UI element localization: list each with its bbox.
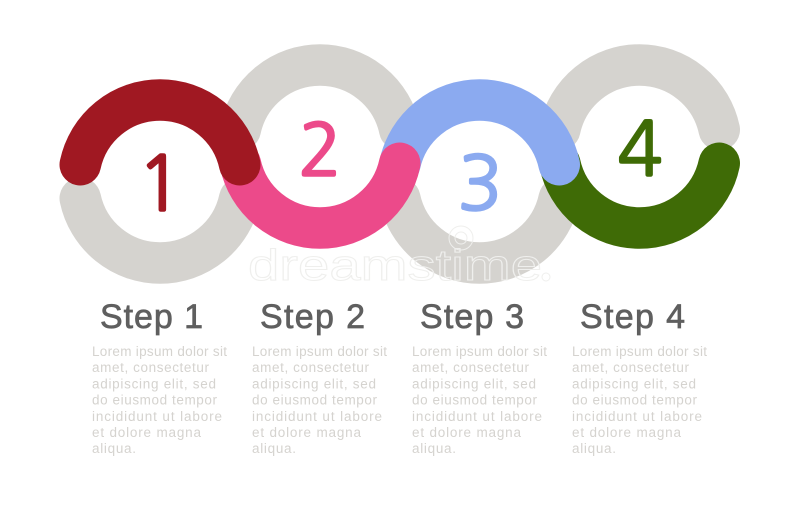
text block: step 1: adipiscing elit, sed (92, 376, 216, 392)
text block: step 4: amet, consectetur (572, 360, 690, 375)
arc: step 4 green (560, 163, 719, 228)
arc: step 2 pink (240, 163, 400, 228)
watermark: dreamstime (248, 241, 542, 290)
text block: step 2: Lorem ipsum dolor sit (252, 344, 387, 359)
number 3: 3 (458, 147, 502, 221)
text block: step 2: incididunt ut labore (252, 409, 382, 424)
text block: step 2: et dolore magna (252, 425, 361, 440)
text block: step 3: aliqua. (412, 441, 456, 456)
text block: step 3: do eiusmod tempor (412, 392, 538, 408)
text block: step 4: et dolore magna (572, 425, 681, 440)
number 2: 2 (298, 116, 342, 186)
text block: step 3: Lorem ipsum dolor sit (412, 344, 547, 359)
number 1: 1 (137, 146, 183, 222)
chain of grey background arcs (80, 65, 719, 263)
text block: step 2: aliqua. (252, 441, 296, 456)
heading: Step 3: Step 3 (420, 298, 524, 336)
number 4: 4 (618, 112, 662, 186)
text block: step 1: Lorem ipsum dolor sit (92, 344, 227, 359)
text block: step 3: incididunt ut labore (412, 409, 542, 424)
text block: step 2: do eiusmod tempor (252, 392, 378, 408)
text block: step 4: aliqua. (572, 441, 616, 456)
text block: step 3: adipiscing elit, sed (412, 376, 536, 392)
text block: step 1: amet, consectetur (92, 360, 210, 375)
text block: step 2: adipiscing elit, sed (252, 376, 376, 392)
text block: step 3: amet, consectetur (412, 360, 530, 375)
text block: step 3 (412, 344, 547, 456)
text block: step 1: aliqua. (92, 441, 136, 456)
text block: step 1: do eiusmod tempor (92, 392, 218, 408)
arc: step 1 red (80, 100, 240, 165)
text block: step 1: incididunt ut labore (92, 409, 222, 424)
text block: step 2: amet, consectetur (252, 360, 370, 375)
text block: step 4: incididunt ut labore (572, 409, 702, 424)
heading: Step 4: Step 4 (580, 298, 685, 336)
arc: step 3 blue (400, 100, 559, 165)
text block: step 3: et dolore magna (412, 425, 521, 440)
text block: step 4: adipiscing elit, sed (572, 376, 696, 392)
heading: Step 1: Step 1 (100, 298, 203, 336)
text block: step 1: et dolore magna (92, 425, 201, 440)
watermark (248, 226, 550, 290)
text block: step 4: Lorem ipsum dolor sit (572, 344, 707, 359)
text block: step 4: do eiusmod tempor (572, 392, 698, 408)
heading: Step 2: Step 2 (260, 298, 365, 336)
text block: step 4 (572, 344, 707, 456)
text block: step 1 (92, 344, 227, 456)
text block: step 2 (252, 344, 387, 456)
